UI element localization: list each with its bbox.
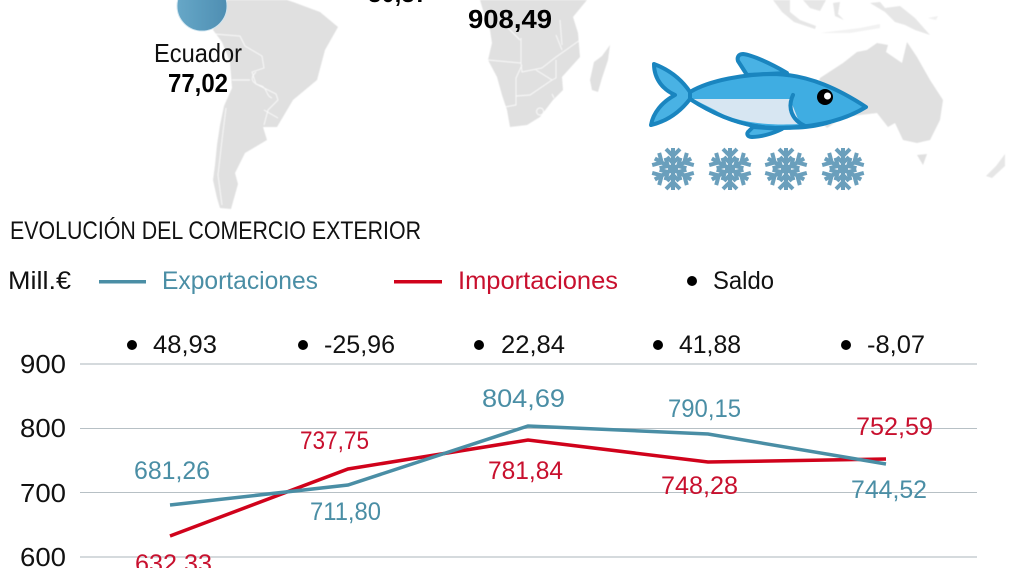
exportaciones values: 681,26 (134, 457, 210, 485)
map: Southeast Asia islands (773, 0, 938, 35)
snowflake 1 (651, 148, 695, 190)
importaciones values (135, 413, 933, 568)
legend: importaciones label: Importaciones (458, 267, 618, 295)
fish lower body line (690, 99, 830, 128)
legend: importaciones line (394, 280, 442, 284)
series: exportaciones (170, 426, 886, 505)
map: Tasmania (917, 154, 927, 165)
series: importaciones (170, 440, 886, 536)
map: Madagascar (590, 45, 610, 92)
saldo 4: 41,88 (679, 331, 741, 359)
icon: fish (651, 54, 866, 137)
exportaciones values (134, 385, 927, 526)
saldo 2: -25,96 (324, 331, 395, 359)
y axis labels: 900 (20, 349, 66, 379)
snowflake 2 (708, 148, 752, 190)
saldo 1 (127, 331, 217, 359)
fish body (690, 74, 866, 128)
y axis labels: 700 (20, 478, 66, 508)
fish belly (693, 99, 800, 124)
map: Australia (810, 42, 943, 143)
importaciones values: 737,75 (300, 427, 369, 455)
map: Africa (480, 0, 587, 127)
unit label: Mill.€ (8, 267, 71, 295)
snowflake 3 (764, 148, 808, 190)
fish gill (790, 95, 805, 126)
y axis labels: 800 (20, 413, 66, 443)
exportaciones values: 790,15 (668, 395, 741, 423)
fish tail (651, 64, 690, 125)
fish top fin (738, 54, 787, 75)
line chart (20, 349, 977, 568)
saldo 5 (841, 331, 925, 359)
legend (8, 267, 774, 295)
saldo 5: -8,07 (867, 331, 925, 359)
exportaciones values: 711,80 (310, 498, 381, 526)
snowflake 4 (821, 148, 865, 190)
saldo row (127, 331, 925, 359)
label: Ecuador: Ecuador (154, 38, 242, 68)
fish bottom fin (747, 127, 782, 137)
importaciones values: 781,84 (488, 457, 563, 485)
importaciones values: 748,28 (661, 472, 738, 500)
bubble: Ecuador (177, 0, 227, 31)
value: 908,49: 908,49 (468, 4, 552, 34)
saldo 1: 48,93 (153, 331, 217, 359)
value: Ecuador: 77,02 (168, 68, 228, 98)
heading: EVOLUCIÓN DEL COMERCIO EXTERIOR (10, 216, 421, 245)
icon: snowflakes (651, 148, 865, 190)
legend: exportaciones line (99, 280, 146, 284)
legend: saldo dot (687, 276, 697, 286)
grid lines (80, 363, 977, 558)
saldo 3: 22,84 (501, 331, 565, 359)
legend: exportaciones label: Exportaciones (162, 267, 318, 295)
importaciones values: 752,59 (856, 413, 933, 441)
legend: saldo label: Saldo (713, 267, 774, 295)
fish eye highlight (824, 92, 831, 100)
saldo 3 (474, 331, 565, 359)
exportaciones values: 744,52 (851, 476, 927, 504)
fish eye (817, 89, 833, 105)
world map background (213, 0, 1005, 209)
y axis labels (20, 349, 66, 568)
map: New Zealand (986, 154, 1005, 178)
map: South America (213, 0, 338, 209)
exportaciones values: 804,69 (482, 385, 565, 413)
